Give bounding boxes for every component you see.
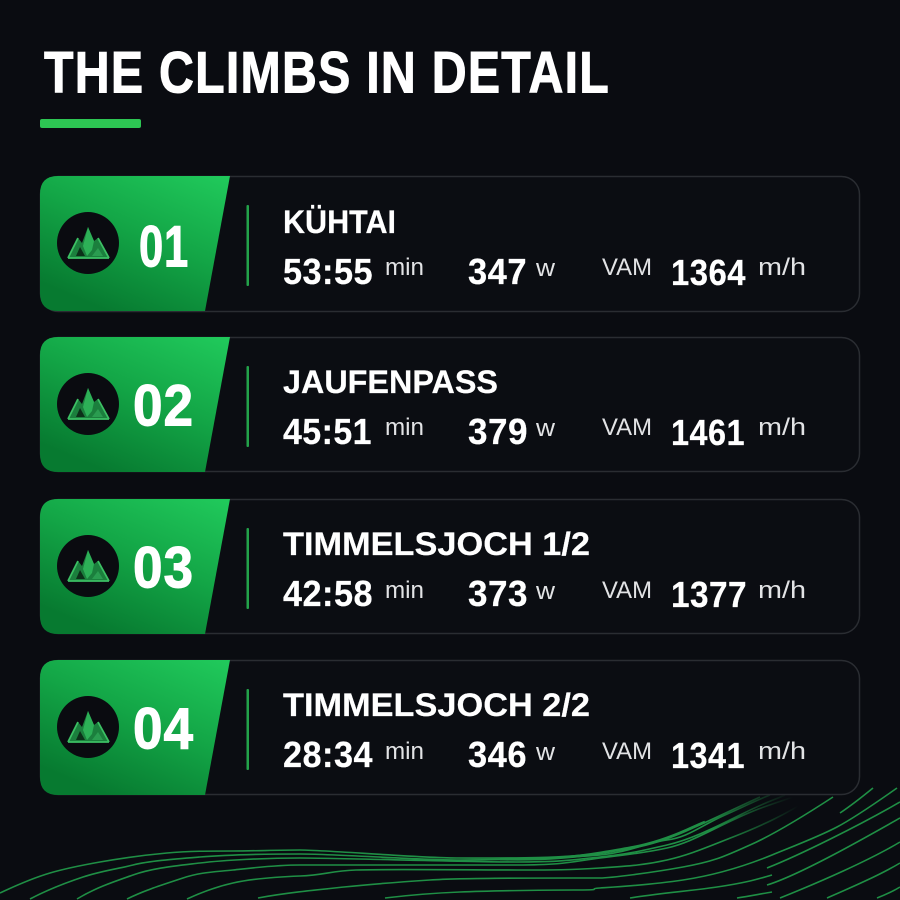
VAM: m/h <box>758 738 806 765</box>
number badge <box>40 660 230 795</box>
power: 379 <box>468 411 528 452</box>
divider <box>246 366 249 447</box>
VAM: m/h <box>758 254 806 281</box>
time <box>283 251 424 292</box>
power: 347 <box>468 251 527 292</box>
climb name: TIMMELSJOCH 2/2 <box>283 687 590 723</box>
number badge <box>40 499 230 634</box>
time: 42:58 <box>283 573 373 614</box>
divider <box>246 528 249 609</box>
icon: mountain <box>57 212 119 274</box>
VAM: 1364 <box>671 252 746 293</box>
climb name: KÜHTAI <box>283 204 396 240</box>
VAM: m/h <box>758 577 806 604</box>
number: 04 <box>133 696 194 762</box>
title: THE CLIMBS IN DETAIL <box>44 40 610 106</box>
VAM: VAM <box>602 738 652 765</box>
divider <box>246 689 249 770</box>
panel: climb 04 Timmelsjoch 2/2 <box>40 660 860 795</box>
number: 02 <box>133 374 194 438</box>
number badge <box>40 337 230 472</box>
card background <box>40 500 860 634</box>
time: min <box>385 738 424 765</box>
number badge <box>40 176 230 311</box>
VAM: VAM <box>602 254 652 281</box>
climb name: TIMMELSJOCH 1/2 <box>283 526 590 562</box>
time: min <box>385 254 424 281</box>
time: 45:51 <box>283 411 372 452</box>
number: 01 <box>139 214 189 280</box>
card background <box>40 338 860 472</box>
power: w <box>535 415 556 442</box>
VAM: 1461 <box>671 412 745 453</box>
power: w <box>535 578 556 605</box>
VAM: 1341 <box>671 735 745 776</box>
power: w <box>535 255 556 282</box>
card background <box>40 660 860 794</box>
divider <box>246 205 249 286</box>
time: min <box>385 414 424 441</box>
card background <box>40 176 860 312</box>
power: w <box>535 739 556 766</box>
time <box>283 734 424 775</box>
power: 346 <box>468 734 527 775</box>
panel: climb 03 Timmelsjoch 1/2 <box>40 499 860 634</box>
time <box>283 411 424 452</box>
number: 03 <box>133 536 194 600</box>
time <box>283 573 424 614</box>
VAM <box>602 412 806 453</box>
VAM: VAM <box>602 577 652 604</box>
panel: climb 01 Kühtai <box>40 176 860 312</box>
VAM: 1377 <box>671 574 747 615</box>
VAM: VAM <box>602 414 652 441</box>
icon: mountain <box>57 373 119 435</box>
panel: climb 02 Jaufenpass <box>40 337 860 472</box>
title underline accent <box>40 119 141 128</box>
climb name: JAUFENPASS <box>283 364 498 400</box>
VAM <box>602 735 806 776</box>
icon: mountain <box>57 535 119 597</box>
VAM <box>602 574 806 615</box>
time: 28:34 <box>283 734 373 775</box>
icon: mountain <box>57 696 119 758</box>
decorative contour waves <box>0 788 900 899</box>
power: 373 <box>468 573 528 614</box>
time: min <box>385 577 424 604</box>
VAM: m/h <box>758 414 806 441</box>
time: 53:55 <box>283 251 373 292</box>
VAM <box>602 252 806 293</box>
